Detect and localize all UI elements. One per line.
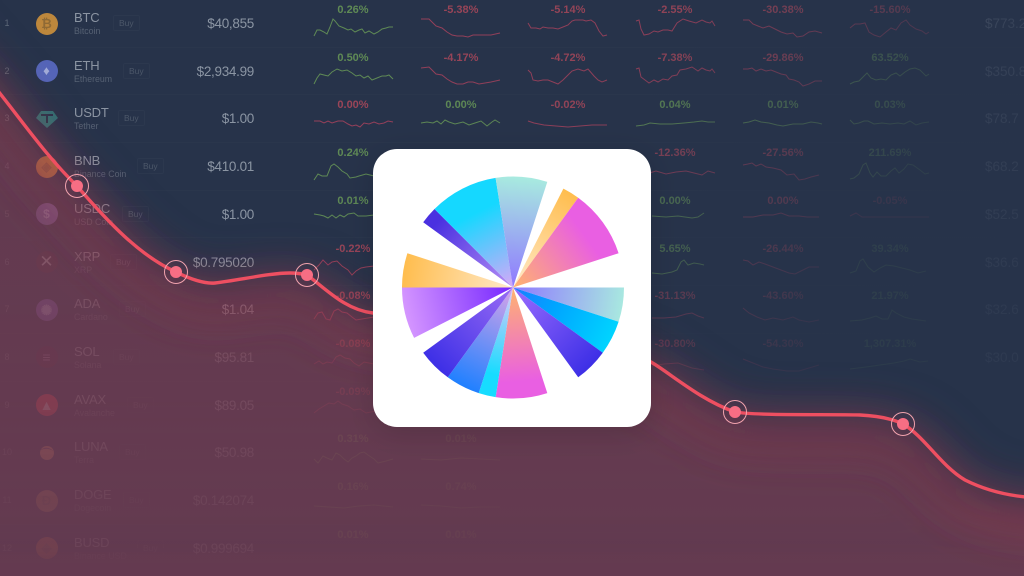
row 10 LUNA: LUNA — [74, 439, 108, 454]
row 6 XRP: XRP — [74, 248, 100, 264]
row 1 BTC: Bitcoin — [74, 26, 100, 36]
row 1 BTC: -30.38% — [762, 4, 803, 16]
row 8 SOL: 1,307.31% — [864, 338, 916, 350]
row 1 BTC: -5.14% — [551, 4, 585, 16]
row 11 DOGE: Dogecoin — [74, 503, 111, 513]
row 12 BUSD: Buy — [143, 543, 158, 553]
row 5 USDC: 5 — [4, 209, 10, 219]
price line — [0, 91, 1024, 497]
row 1 BTC: Buy — [119, 18, 134, 28]
row 7 ADA: 7 — [4, 304, 10, 314]
row 11 DOGE: 0.16% — [337, 481, 369, 493]
data point 4 — [724, 400, 746, 424]
row 8 SOL — [0, 334, 1024, 382]
row 4 BNB — [0, 143, 1024, 191]
row 11 DOGE: $0.142074 — [193, 493, 254, 508]
row 8 SOL: -0.08% — [336, 338, 370, 350]
icon: dogecoin — [36, 490, 58, 512]
row 7 ADA: $32.6 — [985, 302, 1019, 317]
row 4 BNB: BNB — [74, 153, 100, 168]
red glow under the line — [0, 65, 1024, 523]
row 12 BUSD: 12 — [2, 543, 12, 553]
row 12 BUSD — [0, 525, 1024, 572]
icon: bitcoin — [36, 12, 58, 34]
row 1 BTC: $40,855 — [207, 16, 254, 31]
row 2 ETH — [0, 48, 1024, 95]
row 4 BNB: 211.69% — [869, 147, 911, 159]
row 7 ADA: Cardano — [74, 312, 108, 322]
row 10 LUNA: 10 — [2, 447, 12, 457]
row 6 XRP: -26.44% — [762, 242, 803, 254]
row 4 BNB: $410.01 — [207, 159, 254, 174]
row 3 USDT: 0.03% — [874, 99, 906, 111]
data point 1 — [66, 174, 88, 198]
row 12 BUSD: Binance USD — [74, 551, 127, 561]
row 7 ADA: -0.08% — [336, 290, 370, 302]
icon: solana — [36, 346, 58, 368]
row 9 AVAX — [0, 382, 1024, 429]
icon: solana: ≡ — [42, 349, 51, 365]
row 3 USDT — [0, 95, 1024, 143]
row 11 DOGE: DOGE — [74, 487, 111, 502]
row 1 BTC: -5.38% — [444, 4, 478, 16]
row 5 USDC: $1.00 — [222, 207, 254, 222]
row 9 AVAX: -0.09% — [336, 386, 370, 398]
row 11 DOGE: 11 — [2, 495, 12, 505]
icon: binance coin — [36, 156, 58, 178]
row 2 ETH: -29.86% — [762, 52, 803, 64]
row 7 ADA: Buy — [125, 304, 140, 314]
row 6 XRP: XRP — [74, 264, 92, 274]
icon: usd coin: $ — [43, 207, 50, 221]
row 12 BUSD: $0.999694 — [193, 541, 254, 556]
row 6 XRP: $36.6 — [985, 254, 1019, 270]
row 8 SOL: $30.0 — [985, 350, 1019, 365]
row 9 AVAX: Buy — [133, 400, 148, 410]
row 12 BUSD: 0.01% — [337, 529, 369, 541]
icon: cardano: ✺ — [41, 302, 52, 318]
icon: tether — [36, 111, 58, 128]
row 8 SOL: -30.80% — [654, 338, 695, 350]
row 3 USDT: Tether — [74, 121, 98, 131]
row 10 LUNA: Terra — [74, 455, 94, 465]
row 5 USDC: $52.5 — [985, 207, 1019, 222]
icon: binance coin: ◈ — [42, 159, 52, 174]
row 1 BTC: 0.26% — [337, 4, 369, 16]
icon: luna — [40, 446, 54, 460]
row 7 ADA: $1.04 — [222, 302, 254, 317]
icon: binance usd: ◈ — [42, 540, 52, 555]
row 7 ADA — [0, 286, 1024, 334]
row 3 USDT: USDT — [74, 105, 109, 120]
row 9 AVAX: Avalanche — [74, 408, 115, 418]
row 3 USDT: $78.7 — [985, 111, 1019, 126]
row 2 ETH: -4.17% — [444, 52, 478, 64]
row 4 BNB: -12.36% — [654, 147, 695, 159]
icon: xrp: ✕ — [39, 252, 54, 271]
row 1 BTC: -2.55% — [658, 4, 692, 16]
row 2 ETH: Ethereum — [74, 74, 112, 84]
row 8 SOL: -54.30% — [762, 338, 803, 350]
white rounded card — [373, 149, 651, 427]
row 2 ETH: -7.38% — [658, 52, 692, 64]
row 1 BTC: BTC — [74, 10, 99, 25]
row 6 XRP — [0, 238, 1024, 286]
row 9 AVAX: $89.05 — [214, 398, 254, 413]
row 6 XRP: Buy — [116, 256, 131, 266]
row 9 AVAX: AVAX — [74, 392, 106, 407]
row 11 DOGE: Buy — [129, 495, 144, 505]
icon: ethereum — [36, 60, 58, 82]
row 7 ADA: ADA — [74, 296, 100, 311]
row 10 LUNA — [0, 429, 1024, 477]
icon: usd coin — [36, 203, 58, 225]
row 5 USDC: USDC — [74, 201, 110, 216]
icon: avalanche — [36, 394, 58, 416]
row 8 SOL: Buy — [119, 352, 134, 362]
row 5 USDC: Buy — [128, 209, 143, 219]
row 5 USDC — [0, 191, 1024, 238]
row 2 ETH: ETH — [74, 58, 99, 73]
data point 5 — [892, 412, 914, 436]
row 4 BNB: Binance Coin — [74, 169, 126, 179]
row 3 USDT: 0.00% — [445, 99, 477, 111]
row 4 BNB: $68.2 — [985, 159, 1019, 174]
row 8 SOL: SOL — [74, 344, 99, 359]
row 2 ETH: $2,934.99 — [197, 64, 254, 79]
row 5 USDC: -0.05% — [873, 195, 907, 207]
row 5 USDC: 0.00% — [659, 195, 691, 207]
row 10 LUNA: 0.31% — [337, 433, 369, 445]
row 8 SOL: $95.81 — [214, 350, 254, 365]
row 2 ETH: -4.72% — [551, 52, 585, 64]
row 2 ETH: 0.50% — [337, 52, 369, 64]
icon: dogecoin: Ð — [42, 492, 51, 508]
row 3 USDT: 0.00% — [337, 99, 369, 111]
row 2 ETH: 2 — [4, 66, 10, 76]
row 6 XRP: 39.34% — [871, 242, 909, 254]
row 4 BNB: -27.56% — [762, 147, 803, 159]
row 3 USDT: 0.01% — [767, 99, 799, 111]
row 1 BTC: 1 — [4, 18, 10, 28]
row 7 ADA: -31.13% — [654, 290, 695, 302]
row 8 SOL: Solana — [74, 360, 101, 370]
row 8 SOL: 8 — [4, 352, 10, 362]
row 4 BNB: 0.24% — [337, 147, 369, 159]
row 2 ETH: Buy — [129, 66, 144, 76]
data point 3 — [296, 264, 318, 286]
row 1 BTC: -15.60% — [870, 4, 910, 16]
row 4 BNB: Buy — [143, 161, 158, 171]
row 11 DOGE: 0.74% — [445, 481, 477, 493]
row 3 USDT: $1.00 — [222, 111, 254, 126]
row 10 LUNA: $50.98 — [214, 445, 254, 460]
row 3 USDT: 0.04% — [659, 99, 691, 111]
icon: avalanche: ▲ — [40, 397, 53, 413]
icon: xrp — [36, 251, 58, 273]
row 5 USDC: 0.01% — [337, 195, 369, 207]
data point 2 — [164, 260, 188, 284]
row 3 USDT: Buy — [124, 113, 139, 123]
row 11 DOGE — [0, 477, 1024, 525]
row 1 BTC — [0, 0, 1024, 48]
row 10 LUNA: Buy — [125, 447, 140, 457]
row 3 USDT: -0.02% — [551, 99, 585, 111]
row 9 AVAX: 9 — [4, 400, 10, 410]
row 6 XRP: -0.22% — [336, 242, 370, 254]
row 4 BNB: 4 — [4, 161, 10, 171]
row 12 BUSD: BUSD — [74, 535, 109, 550]
row 7 ADA: -43.60% — [762, 290, 803, 302]
row 3 USDT: 3 — [4, 113, 10, 123]
row 7 ADA: 21.97% — [871, 290, 909, 302]
row 5 USDC: USD Coin — [74, 217, 113, 227]
icon: binance usd — [36, 537, 58, 559]
icon: cardano — [36, 299, 58, 321]
row 10 LUNA: 0.01% — [445, 433, 477, 445]
icon: ethereum: ♦ — [43, 63, 50, 78]
pie wheel — [402, 177, 624, 398]
row 6 XRP: 6 — [4, 256, 10, 266]
row 5 USDC: 0.00% — [767, 195, 799, 207]
row 6 XRP: $0.795020 — [193, 254, 254, 270]
icon: bitcoin: ₿ — [41, 16, 52, 30]
row 12 BUSD: 0.01% — [445, 529, 477, 541]
row 6 XRP: 5.65% — [659, 242, 691, 254]
row 2 ETH: 63.52% — [871, 52, 909, 64]
